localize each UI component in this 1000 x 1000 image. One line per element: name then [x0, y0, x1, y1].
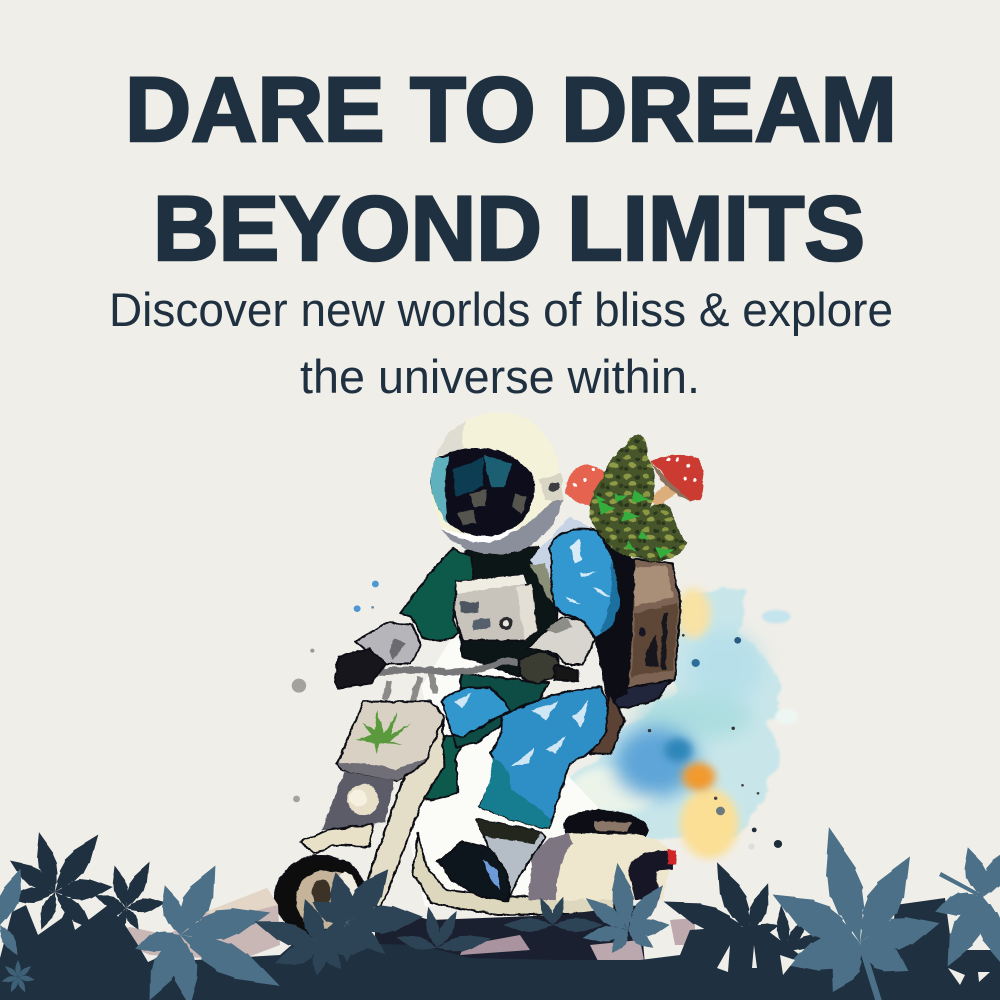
leaf: slate beside wheel: [251, 896, 372, 977]
leaf: large blue right: [764, 823, 943, 1000]
scooter headlight and fork: [322, 720, 444, 950]
handlebar: [337, 661, 577, 702]
seat strap: [590, 693, 625, 754]
subtitle: [109, 283, 893, 403]
leaf: dark upper left: [4, 828, 114, 937]
leaf: slate center right: [503, 895, 603, 932]
scooter rear body and seat: [528, 811, 677, 900]
watercolor splash: [563, 587, 798, 858]
leaf: slate center: [395, 906, 493, 956]
helmet: [431, 412, 563, 554]
leaf: dark right: [659, 857, 780, 945]
title: DARE TO DREAM: [125, 59, 897, 161]
leaf: dark small behind big leaf: [775, 905, 834, 956]
leaf: small dark: [92, 858, 167, 938]
ground: dark foliage silhouette: [0, 898, 1000, 1000]
leaf: slate center left: [303, 861, 424, 962]
rider and scooter painted figure: [276, 412, 704, 950]
backpack: [590, 527, 681, 708]
paint speckles: [292, 581, 782, 850]
right arm: blue sleeve: [549, 529, 620, 637]
legs: [423, 673, 608, 828]
chest control box: [454, 575, 537, 641]
right glove: [518, 617, 595, 684]
title: [125, 59, 897, 280]
mushrooms: [565, 455, 704, 507]
pale gaps between foliage: [717, 945, 990, 985]
scooter front fender: [300, 824, 373, 854]
left arm: green sleeve: [400, 548, 473, 642]
leaf: blue right edge: [932, 839, 1000, 973]
road wash: mauve ground strokes: [103, 888, 695, 965]
leaf: small blue at bottom left: [1, 960, 35, 994]
illustration: astronaut riding a scooter: [276, 412, 798, 950]
subtitle: Discover new worlds of bliss & explore: [109, 283, 893, 336]
scooter floorboard: [413, 833, 614, 915]
scooter front wheel: [276, 856, 366, 937]
left glove: [335, 623, 422, 688]
subtitle: the universe within.: [300, 350, 700, 403]
white backing behind rider: [408, 637, 601, 907]
rider boot: [437, 819, 546, 902]
title: BEYOND LIMITS: [153, 178, 865, 280]
scooter underside shadow: [375, 905, 645, 965]
torso: [456, 547, 558, 677]
cannabis bud: [588, 433, 687, 562]
scooter front panel with leaf: [337, 702, 444, 781]
collar and strap: [530, 517, 592, 603]
leaf: blue lower left: [132, 859, 287, 1000]
leaf: blue center right: [580, 861, 671, 957]
leaf: blue at left edge: [0, 865, 30, 959]
